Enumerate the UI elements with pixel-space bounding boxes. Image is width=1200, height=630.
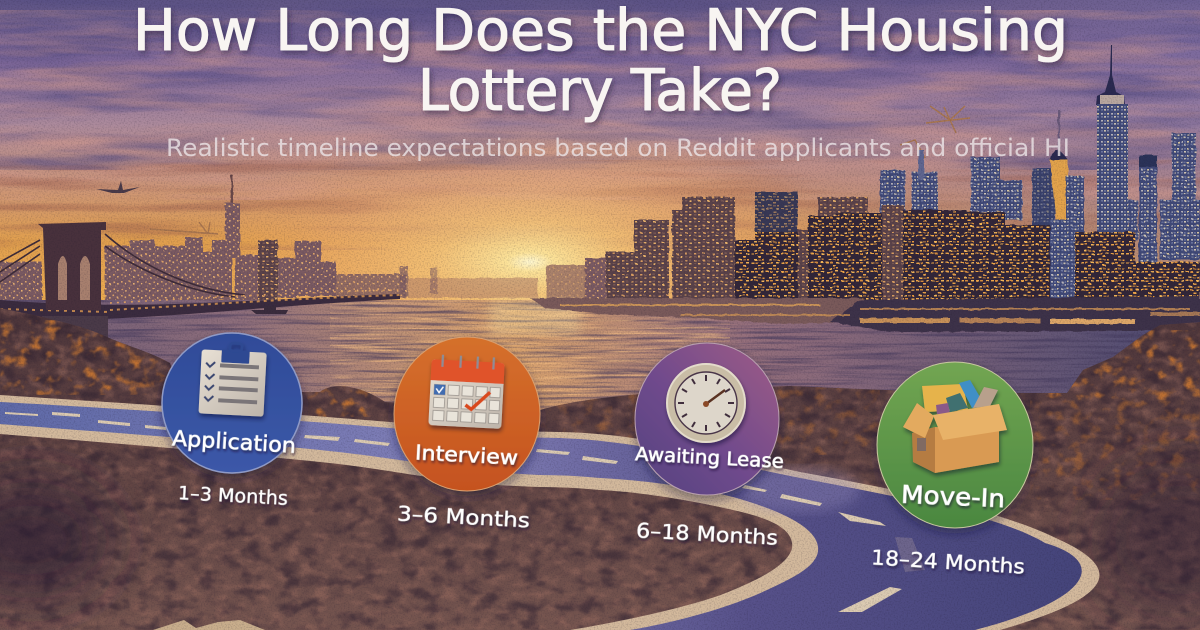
step 2: interview: [394, 337, 540, 532]
icon: clock: [667, 364, 745, 442]
upper right skyline: [818, 110, 1200, 265]
orange disc: [394, 337, 540, 491]
far shore with city lights: [530, 296, 1200, 332]
One World Trade tower: [1096, 45, 1128, 234]
step 3: awaiting lease: [635, 343, 784, 550]
title: Lottery Take?: [418, 58, 782, 124]
icon: calendar: [428, 354, 505, 429]
land with autumn brush: [0, 300, 1200, 630]
purple disc: [635, 343, 779, 495]
duration: 3–6 Months: 3–6 Months: [396, 502, 531, 532]
boat: [251, 306, 288, 314]
label: Move-In: Move-In: [900, 480, 1006, 513]
plane: [96, 181, 140, 193]
duration: 6–18 Months: 6–18 Months: [635, 518, 779, 550]
blue disc: [162, 333, 302, 473]
duration: 18–24 Months: 18–24 Months: [870, 545, 1026, 579]
duration: 1–3 Months: 1–3 Months: [177, 483, 288, 510]
step 4: move-in: [870, 362, 1033, 579]
label: Application: Application: [171, 426, 297, 459]
sky: [0, 0, 1200, 310]
icon: clipboard: [198, 341, 267, 417]
step 1: application: [162, 333, 302, 510]
title: [133, 0, 1068, 124]
construction cranes: [150, 106, 970, 234]
road lane dashes: [5, 412, 902, 612]
label: Interview: Interview: [414, 440, 519, 470]
label: Awaiting Lease: Awaiting Lease: [635, 444, 784, 473]
Brooklyn Bridge: [0, 222, 400, 340]
far left skyline: [0, 175, 538, 308]
central towers right of the sun: [546, 252, 634, 305]
icon: moving box with books: [903, 380, 1007, 473]
winding road: [0, 395, 1099, 630]
green disc: [877, 362, 1033, 528]
water: [0, 300, 1200, 412]
lower right skyline with lit windows: [634, 192, 1200, 306]
subtitle: Realistic timeline expectations based on Reddit applicants and official HI: [166, 134, 1070, 162]
bottom edge ornament: [153, 620, 265, 630]
